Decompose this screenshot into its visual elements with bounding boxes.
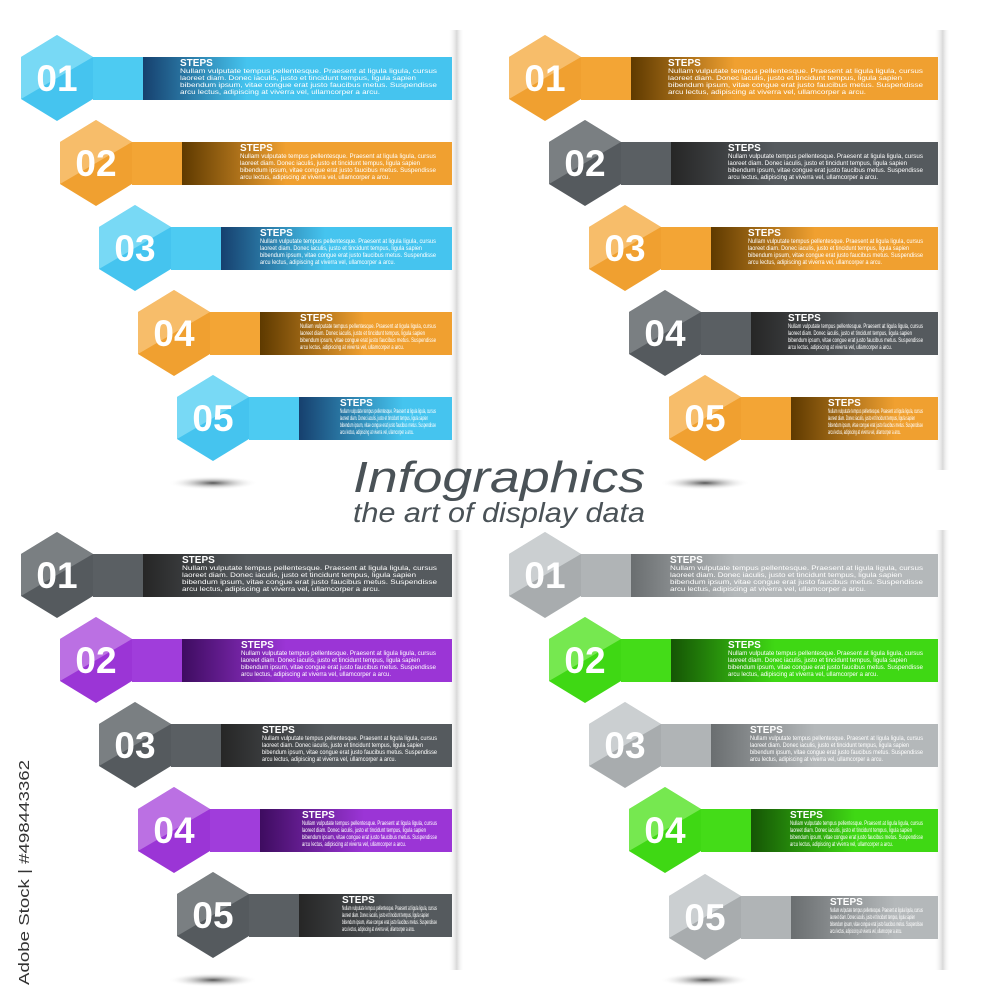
step 04 (629, 290, 938, 376)
step 01: arcu lectus, adipiscing at viverra vel, ullamcorper a arcu. (668, 89, 866, 96)
step 02: arcu lectus, adipiscing at viverra vel, ullamcorper a arcu. (728, 671, 878, 678)
step 05: Nullam vulputate tempus pellentesque. Praesent at ligula ligula, cursus (342, 905, 437, 912)
step 02: 02 (75, 640, 117, 681)
step 04: Nullam vulputate tempus pellentesque. Praesent at ligula ligula, cursus (788, 323, 923, 330)
panel: top-right (orange/dark gray) (509, 35, 938, 461)
step 04: 04 (644, 810, 686, 851)
step 01: STEPS (670, 555, 703, 566)
step 05: Nullam vulputate tempus pellentesque. Praesent at ligula ligula, cursus (340, 408, 436, 415)
panel: bottom-right (light gray/green) (509, 532, 938, 960)
step 04: 04 (153, 313, 195, 354)
step 04 (138, 787, 452, 873)
step 02: Nullam vulputate tempus pellentesque. Praesent at ligula ligula, cursus (728, 153, 924, 160)
step 01: STEPS (180, 58, 213, 69)
step 05: laoreet diam. Donec iaculis, justo et tincidunt tempus, ligula sapien (342, 912, 429, 919)
step 01: bibendum ipsum, vitae congue erat justo faucibus metus. Suspendisse (182, 579, 437, 586)
step 02: laoreet diam. Donec iaculis, justo et tincidunt tempus, ligula sapien (728, 657, 907, 664)
panel: bottom-left (dark gray/purple) (21, 532, 452, 958)
step 03: arcu lectus, adipiscing at viverra vel, ullamcorper a arcu. (260, 259, 395, 266)
step 05 (669, 874, 938, 960)
step 01: 01 (36, 58, 78, 99)
step 05: STEPS (340, 398, 373, 409)
step 05 (177, 375, 452, 461)
step 01: arcu lectus, adipiscing at viverra vel, ullamcorper a arcu. (670, 586, 866, 593)
step 04: Nullam vulputate tempus pellentesque. Praesent at ligula ligula, cursus (302, 820, 437, 827)
step 01: arcu lectus, adipiscing at viverra vel, ullamcorper a arcu. (182, 586, 380, 593)
step 05: 05 (684, 897, 726, 938)
step 04: bibendum ipsum, vitae congue erat justo faucibus metus. Suspendisse (788, 337, 923, 344)
step 03: arcu lectus, adipiscing at viverra vel, ullamcorper a arcu. (750, 756, 883, 763)
step 03: STEPS (262, 725, 295, 736)
step 03: 03 (604, 228, 646, 269)
step 05: bibendum ipsum, vitae congue erat justo faucibus metus. Suspendisse (342, 919, 437, 926)
step 03: bibendum ipsum, vitae congue erat justo faucibus metus. Suspendisse (262, 749, 437, 756)
step 03: laoreet diam. Donec iaculis, justo et tincidunt tempus, ligula sapien (262, 742, 423, 749)
shadows under last hexagons (168, 476, 750, 987)
step 02: laoreet diam. Donec iaculis, justo et tincidunt tempus, ligula sapien (728, 160, 907, 167)
step 02: STEPS (240, 143, 273, 154)
step 03: laoreet diam. Donec iaculis, justo et tincidunt tempus, ligula sapien (750, 742, 909, 749)
step 03: Nullam vulputate tempus pellentesque. Praesent at ligula ligula, cursus (750, 735, 924, 742)
step 02: bibendum ipsum, vitae congue erat justo faucibus metus. Suspendisse (728, 167, 923, 174)
step 02 (60, 617, 452, 703)
step 03: bibendum ipsum, vitae congue erat justo faucibus metus. Suspendisse (260, 252, 436, 259)
step 03: bibendum ipsum, vitae congue erat justo faucibus metus. Suspendisse (748, 252, 923, 259)
step 01: laoreet diam. Donec iaculis, justo et tincidunt tempus, ligula sapien (180, 75, 416, 82)
step 05: laoreet diam. Donec iaculis, justo et tincidunt tempus, ligula sapien (340, 415, 428, 422)
step 03 (589, 205, 938, 291)
step 01 (509, 532, 938, 618)
step 03 (589, 702, 938, 788)
step 03: 03 (604, 725, 646, 766)
step 04: Nullam vulputate tempus pellentesque. Praesent at ligula ligula, cursus (790, 820, 923, 827)
title: the art of display data (353, 497, 645, 528)
step 04: bibendum ipsum, vitae congue erat justo faucibus metus. Suspendisse (300, 337, 436, 344)
step 04: bibendum ipsum, vitae congue erat justo faucibus metus. Suspendisse (302, 834, 437, 841)
step 04: laoreet diam. Donec iaculis, justo et tincidunt tempus, ligula sapien (302, 827, 426, 834)
step 05: 05 (192, 895, 234, 936)
step 02: Nullam vulputate tempus pellentesque. Praesent at ligula ligula, cursus (241, 650, 437, 657)
title (353, 453, 645, 528)
step 03: arcu lectus, adipiscing at viverra vel, ullamcorper a arcu. (748, 259, 882, 266)
step 02: Nullam vulputate tempus pellentesque. Praesent at ligula ligula, cursus (240, 153, 437, 160)
step 02: STEPS (728, 143, 761, 154)
step 01: Nullam vulputate tempus pellentesque. Praesent at ligula ligula, cursus (182, 565, 438, 572)
step 02: bibendum ipsum, vitae congue erat justo faucibus metus. Suspendisse (728, 664, 923, 671)
step 04 (138, 290, 452, 376)
step 04: STEPS (790, 810, 823, 821)
step 02 (549, 617, 938, 703)
panel: top-left (blue/orange) (21, 35, 452, 461)
step 03: arcu lectus, adipiscing at viverra vel, ullamcorper a arcu. (262, 756, 396, 763)
step 01: Nullam vulputate tempus pellentesque. Praesent at ligula ligula, cursus (180, 68, 438, 75)
step 02: 02 (564, 640, 606, 681)
step 03: bibendum ipsum, vitae congue erat justo faucibus metus. Suspendisse (750, 749, 923, 756)
step 05: arcu lectus, adipiscing at viverra vel, ullamcorper a arcu. (340, 429, 414, 436)
step 05 (177, 872, 452, 958)
step 02 (60, 120, 452, 206)
step 01 (21, 532, 452, 618)
step 04: laoreet diam. Donec iaculis, justo et tincidunt tempus, ligula sapien (300, 330, 425, 337)
step 01: Nullam vulputate tempus pellentesque. Praesent at ligula ligula, cursus (670, 565, 924, 572)
step 02: arcu lectus, adipiscing at viverra vel, ullamcorper a arcu. (241, 671, 391, 678)
step 01: bibendum ipsum, vitae congue erat justo faucibus metus. Suspendisse (180, 82, 437, 89)
step 02: 02 (75, 143, 117, 184)
step 02: 02 (564, 143, 606, 184)
step 02: laoreet diam. Donec iaculis, justo et tincidunt tempus, ligula sapien (240, 160, 420, 167)
step 03: laoreet diam. Donec iaculis, justo et tincidunt tempus, ligula sapien (748, 245, 909, 252)
step 02: STEPS (728, 640, 761, 651)
step 04: STEPS (300, 313, 333, 324)
step 01: bibendum ipsum, vitae congue erat justo faucibus metus. Suspendisse (668, 82, 923, 89)
step 05: arcu lectus, adipiscing at viverra vel, ullamcorper a arcu. (830, 928, 902, 935)
step 04: 04 (644, 313, 686, 354)
step 04: Nullam vulputate tempus pellentesque. Praesent at ligula ligula, cursus (300, 323, 436, 330)
step 05: 05 (192, 398, 234, 439)
step 01: laoreet diam. Donec iaculis, justo et tincidunt tempus, ligula sapien (182, 572, 416, 579)
step 03: laoreet diam. Donec iaculis, justo et tincidunt tempus, ligula sapien (260, 245, 422, 252)
step 05: arcu lectus, adipiscing at viverra vel, ullamcorper a arcu. (342, 926, 415, 933)
step 05: STEPS (342, 895, 375, 906)
step 02: bibendum ipsum, vitae congue erat justo faucibus metus. Suspendisse (241, 664, 436, 671)
step 03: Nullam vulputate tempus pellentesque. Praesent at ligula ligula, cursus (260, 238, 437, 245)
step 03: 03 (114, 725, 156, 766)
step 04: STEPS (302, 810, 335, 821)
step 04: bibendum ipsum, vitae congue erat justo faucibus metus. Suspendisse (790, 834, 923, 841)
step 01 (509, 35, 938, 121)
step 03: STEPS (750, 725, 783, 736)
step 01: laoreet diam. Donec iaculis, justo et tincidunt tempus, ligula sapien (668, 75, 902, 82)
step 04: 04 (153, 810, 195, 851)
step 04 (629, 787, 938, 873)
step 02: laoreet diam. Donec iaculis, justo et tincidunt tempus, ligula sapien (241, 657, 420, 664)
step 05: STEPS (830, 897, 863, 908)
step 03 (99, 702, 452, 788)
step 02 (549, 120, 938, 206)
step 03: STEPS (260, 228, 293, 239)
step 02: STEPS (241, 640, 274, 651)
step 01 (21, 35, 452, 121)
step 04: laoreet diam. Donec iaculis, justo et tincidunt tempus, ligula sapien (788, 330, 912, 337)
step 02: Nullam vulputate tempus pellentesque. Praesent at ligula ligula, cursus (728, 650, 924, 657)
step 04: STEPS (788, 313, 821, 324)
step 01: arcu lectus, adipiscing at viverra vel, ullamcorper a arcu. (180, 89, 380, 96)
step 04: arcu lectus, adipiscing at viverra vel, ullamcorper a arcu. (790, 841, 893, 848)
step 01: STEPS (668, 58, 701, 69)
step 03: Nullam vulputate tempus pellentesque. Praesent at ligula ligula, cursus (262, 735, 438, 742)
step 01: bibendum ipsum, vitae congue erat justo faucibus metus. Suspendisse (670, 579, 923, 586)
vertical stock credit: Adobe Stock | #498443362 (16, 760, 33, 985)
step 05 (669, 375, 938, 461)
step 03: Nullam vulputate tempus pellentesque. Praesent at ligula ligula, cursus (748, 238, 924, 245)
step 04: arcu lectus, adipiscing at viverra vel, ullamcorper a arcu. (300, 344, 404, 351)
step 01: 01 (524, 58, 566, 99)
step 05: bibendum ipsum, vitae congue erat justo faucibus metus. Suspendisse (340, 422, 436, 429)
step 05: arcu lectus, adipiscing at viverra vel, ullamcorper a arcu. (828, 429, 901, 436)
step 03 (99, 205, 452, 291)
step 01: Nullam vulputate tempus pellentesque. Praesent at ligula ligula, cursus (668, 68, 924, 75)
step 02: arcu lectus, adipiscing at viverra vel, ullamcorper a arcu. (728, 174, 878, 181)
step 03: 03 (114, 228, 156, 269)
step 04: laoreet diam. Donec iaculis, justo et tincidunt tempus, ligula sapien (790, 827, 912, 834)
step 04: arcu lectus, adipiscing at viverra vel, ullamcorper a arcu. (788, 344, 892, 351)
step 01: 01 (524, 555, 566, 596)
step 01: 01 (36, 555, 78, 596)
step 01: laoreet diam. Donec iaculis, justo et tincidunt tempus, ligula sapien (670, 572, 902, 579)
step 02: arcu lectus, adipiscing at viverra vel, ullamcorper a arcu. (240, 174, 390, 181)
step 02: bibendum ipsum, vitae congue erat justo faucibus metus. Suspendisse (240, 167, 436, 174)
step 01: STEPS (182, 555, 215, 566)
step 04: arcu lectus, adipiscing at viverra vel, ullamcorper a arcu. (302, 841, 406, 848)
title: Infographics (353, 453, 645, 502)
step 03: STEPS (748, 228, 781, 239)
step 05: STEPS (828, 398, 861, 409)
step 05: 05 (684, 398, 726, 439)
panel edge shadows (448, 30, 950, 970)
